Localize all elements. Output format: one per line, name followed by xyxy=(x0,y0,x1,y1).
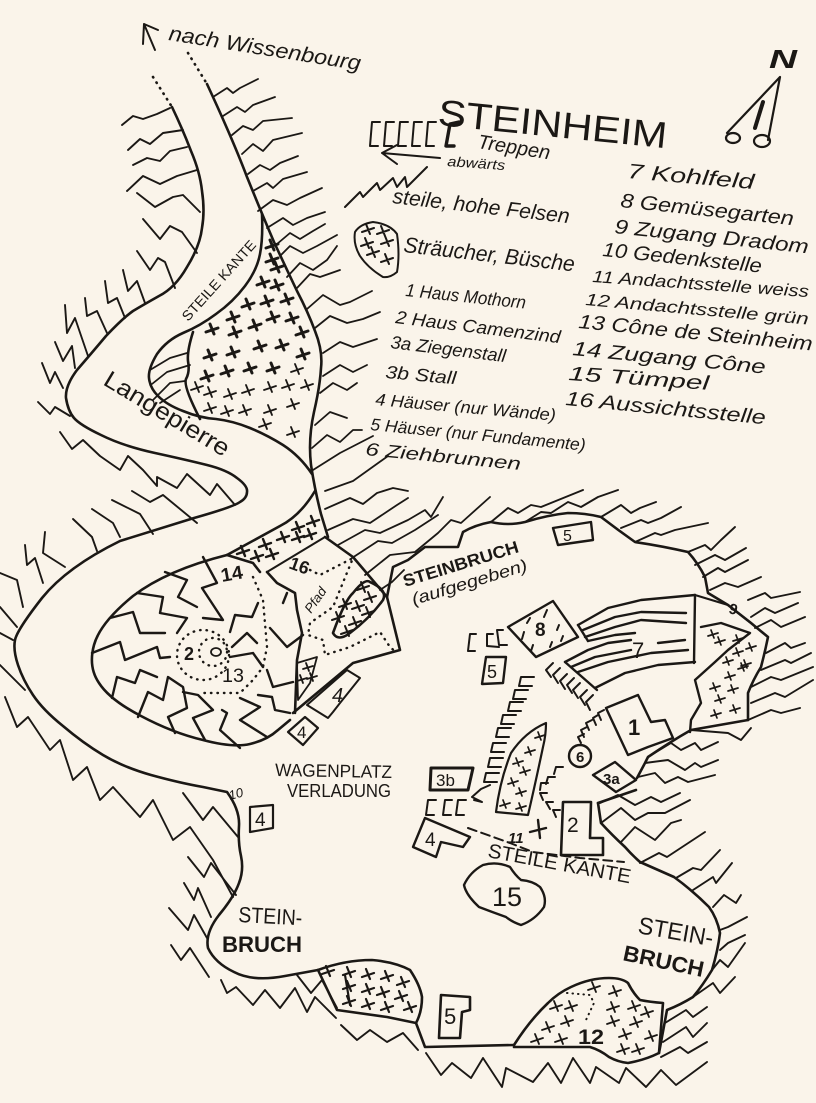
stairs network xyxy=(426,630,604,817)
house 4 square xyxy=(250,805,273,832)
dashed steile Kante line xyxy=(468,828,624,862)
title: STEINHEIM xyxy=(436,92,669,156)
rock hatching east of the road xyxy=(213,79,490,590)
house 2 xyxy=(561,802,603,855)
label: Steinbruch east: BRUCH xyxy=(621,940,706,982)
field 7: Kohlfeld xyxy=(565,595,695,690)
number 7: 7 xyxy=(632,638,644,663)
list of places, right column: 12 Andachtsstelle grün xyxy=(585,290,809,329)
shrub oval near the abandoned quarry xyxy=(332,581,384,638)
label: Steinbruch east xyxy=(621,912,715,982)
number 3a: 3a xyxy=(603,771,620,788)
house 4 small xyxy=(288,717,318,745)
house 5 south xyxy=(439,995,470,1038)
legend: shrub symbol xyxy=(355,222,398,277)
number labels on the hill: 13 xyxy=(222,666,244,687)
label: Steinbruch (aufgegeben) xyxy=(401,537,530,610)
house number 4 small: 4 xyxy=(297,723,306,742)
letter N: N xyxy=(769,44,799,74)
list of places, right column: 16 Aussichtsstelle xyxy=(565,388,767,429)
list of places, right column: 11 Andachtsstelle weiss xyxy=(592,267,810,301)
small shrub patch with crosses xyxy=(297,657,317,700)
house number 5 north: 5 xyxy=(563,528,572,545)
number 4 south: 4 xyxy=(425,830,436,851)
house 1 xyxy=(606,695,673,755)
house 5 west xyxy=(482,657,506,684)
list of places, left column: 1 Haus Mothorn xyxy=(405,280,527,313)
number 10: 10 xyxy=(227,784,245,803)
shrub strip with crosses xyxy=(496,723,546,815)
label: Steinbruch west xyxy=(222,902,303,957)
road outlines: Langepierre valley xyxy=(14,84,328,978)
label: Verladung: VERLADUNG xyxy=(287,781,391,801)
number 3b: 3b xyxy=(436,771,455,790)
Cône centre mark xyxy=(211,648,221,656)
number 8: 8 xyxy=(535,620,546,641)
north arrow xyxy=(726,44,799,147)
house 5 north xyxy=(553,522,593,545)
rock hatching west of the road xyxy=(0,108,707,1087)
number labels on the hill: Pfad xyxy=(301,584,330,616)
shrubs: crosses on the Steile Kante terrace xyxy=(191,240,313,437)
list of places, right column: 8 Gemüsegarten xyxy=(619,190,795,230)
zigzag contours on the hill xyxy=(92,557,303,748)
plateau rim: north and east xyxy=(387,513,768,803)
house number 4 long: 4 xyxy=(332,685,343,707)
legend label: Sträucher, Büsche: Sträucher, Büsche xyxy=(402,232,576,276)
number 2: 2 xyxy=(567,814,579,837)
list of places, left column: 3a Ziegenstall xyxy=(390,332,508,366)
label: Steile Kante south: STEILE KANTE xyxy=(486,840,633,888)
legend label: steile, hohe Felsen: steile, hohe Felsen xyxy=(391,185,571,228)
house number 1: 1 xyxy=(628,715,640,740)
number labels on the hill: 2 xyxy=(184,644,194,664)
label: nach Wissenbourg: nach Wissenbourg xyxy=(167,22,363,75)
hatching inside the steile Kante lens xyxy=(150,353,190,403)
dotted paths: Pfad to the outlook and to the Cône xyxy=(177,558,397,693)
legend label: abwärts: abwärts xyxy=(447,153,506,173)
number 9: 9 xyxy=(727,600,739,619)
number 5 south: 5 xyxy=(444,1004,456,1029)
list of places, right column: 9 Zugang Dradom xyxy=(613,216,810,258)
list of places, left column: 4 Häuser (nur Wände) xyxy=(375,390,557,425)
house number 5 west: 5 xyxy=(487,662,497,682)
east shrub patch xyxy=(690,623,756,732)
label: Langepierre: Langepierre xyxy=(99,366,235,462)
number labels on the hill: 14 xyxy=(219,562,245,587)
rock hatching around the plateau xyxy=(491,490,813,1057)
pond 15 xyxy=(464,863,545,925)
list of places, right column: 10 Gedenkstelle xyxy=(601,239,763,278)
label: Steinbruch west: STEIN- xyxy=(238,902,303,930)
list of places, left column: 5 Häuser (nur Fundamente) xyxy=(370,415,586,455)
ridge line beside the hill xyxy=(267,572,302,713)
label: Steinbruch east: STEIN- xyxy=(636,912,715,952)
legend label: Treppen: Treppen xyxy=(476,131,552,164)
label: Steile Kante along the terrace: STEILE KANTE xyxy=(178,237,259,324)
label: Steinbruch (aufgegeben): (aufgegeben) xyxy=(409,556,530,609)
number 15: 15 xyxy=(492,882,522,912)
well 6 xyxy=(569,745,591,767)
list of places, left column: 3b Stall xyxy=(385,362,458,388)
shrub patch 12 xyxy=(531,982,657,1054)
house 4 south xyxy=(413,818,470,857)
hill of the Cône de Steinheim xyxy=(92,537,400,748)
house number 4 square: 4 xyxy=(255,810,266,831)
list of places, right column: 13 Cône de Steinheim xyxy=(578,311,814,356)
arrow to Wissenbourg xyxy=(143,24,158,50)
legend: stairs symbol xyxy=(370,122,459,164)
legend: cliff symbol xyxy=(345,167,427,207)
dotted trail ends toward Wissenbourg xyxy=(153,53,207,107)
number 6: 6 xyxy=(576,749,584,766)
list of places, left column: 6 Ziehbrunnen xyxy=(365,439,522,474)
list of places, left column xyxy=(365,280,586,474)
number labels on the hill: 16 xyxy=(287,553,312,579)
label: Wagenplatz: WAGENPLATZ xyxy=(275,760,392,782)
house 3a xyxy=(593,762,636,792)
field 8: Gemüsegarten xyxy=(508,601,578,657)
access 9 xyxy=(695,595,751,623)
number 12: 12 xyxy=(578,1026,604,1049)
list of places, right column: 15 Tümpel xyxy=(568,363,711,395)
list of places, left column: 2 Haus Camenzind xyxy=(393,307,563,347)
shrubs strip under the outlook xyxy=(237,516,319,561)
house 4 long xyxy=(307,670,360,718)
number 11: 11 xyxy=(508,830,524,847)
list of places, right column: 14 Zugang Cône xyxy=(572,338,767,379)
label: Steinbruch west: BRUCH xyxy=(222,932,302,957)
list of places, right column xyxy=(565,160,814,429)
list of places, right column: 7 Kohlfeld xyxy=(627,160,757,194)
shed 3b xyxy=(430,768,473,790)
shrub patch south-west xyxy=(322,966,416,1012)
memorial 11 with cross xyxy=(530,820,546,838)
label: Steinbruch (aufgegeben): STEINBRUCH xyxy=(401,538,521,591)
number labels on the hill xyxy=(184,553,330,687)
quarry rim: south and east xyxy=(318,803,720,1063)
